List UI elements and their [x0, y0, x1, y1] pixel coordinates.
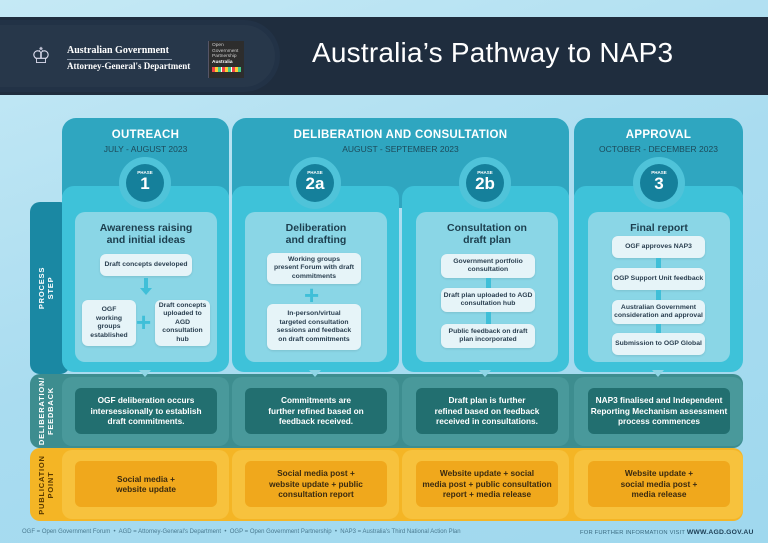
text: DELIBERATION AND CONSULTATION [294, 129, 507, 141]
panel: phase 1 card: hub [176, 336, 189, 343]
panel: phase 1 card: groups [97, 323, 121, 330]
panel: phase 2b card [416, 212, 558, 362]
panel: phase 2b card: Consultation on [447, 222, 527, 234]
OGP logo: Open [212, 43, 224, 48]
side label: deliberation [37, 377, 55, 445]
text: media release [632, 489, 686, 499]
side label: publication [37, 455, 55, 514]
footer: website: FOR FURTHER INFORMATION VISIT WWW.AGD.GOV.AU [580, 529, 754, 536]
OGP logo: Government [212, 48, 238, 54]
panel: phase 3 card: Submission to OGP Global [615, 340, 702, 347]
text: feedback received. [279, 416, 353, 426]
text: Australian Government [67, 44, 172, 60]
text: PHASE [477, 170, 493, 175]
text: APPROVAL [626, 129, 691, 141]
phase inner panels [62, 186, 229, 372]
text: AUGUST - SEPTEMBER 2023 [342, 144, 459, 154]
column headers: OUTREACH [112, 129, 179, 141]
feedback texts: OGF deliberation occurs [98, 395, 194, 405]
phase badges [119, 157, 171, 209]
panel: phase 2b card: draft plan [463, 234, 511, 246]
text: consultation report [278, 489, 354, 499]
side label: publication: PUBLICATION [37, 455, 46, 514]
panel: phase 2a card: commitments [292, 273, 336, 280]
publication texts: website update [116, 484, 176, 494]
OGP logo: Partnership [212, 54, 237, 59]
text: Website update + social [440, 468, 534, 478]
panel: phase 2a card [245, 212, 387, 362]
text: Australian Government: Australian Government [67, 45, 169, 56]
text: refined based on feedback [435, 406, 539, 416]
panel: phase 2a card: present Forum with draft [274, 264, 354, 271]
text: Social media post + [277, 468, 355, 478]
panel: phase 3 card: Final report [630, 222, 688, 234]
panel: phase 3 card: consideration and approval [614, 312, 703, 319]
side label: process step: PROCESS [37, 267, 46, 309]
panel: phase 3 card [588, 212, 730, 362]
icon: coat of arms: ♔ [31, 43, 51, 68]
publication row cells [62, 450, 229, 519]
panel: phase 2b card: Draft plan uploaded to AGD [444, 292, 532, 298]
text: OCTOBER - DECEMBER 2023 [599, 144, 718, 154]
panel: phase 1 card: uploaded to AGD [163, 310, 202, 326]
panel: phase 2a card: targeted consultation [279, 318, 349, 326]
panel: phase 3 card: OGF approves NAP3 [625, 243, 692, 250]
panel: phase 1 card: and initial ideas [107, 234, 185, 246]
phase badges: 1 [140, 174, 150, 193]
logo panel [0, 25, 275, 87]
text: PHASE [651, 170, 667, 175]
feedback texts: draft commitments. [108, 416, 184, 426]
panel: phase 2a card: + [304, 280, 319, 310]
panel: phase 2a card: Deliberation [286, 222, 346, 234]
text: report + media release [443, 489, 531, 499]
panel: phase 1 card: Draft concepts [159, 302, 206, 309]
panel: phase 2a card: Working groups [288, 256, 340, 263]
text: media post + public consultation [422, 479, 552, 489]
feedback texts: intersessionally to establish [90, 406, 202, 416]
text: Website update + [625, 468, 693, 478]
panel: phase 1 card: OGF [102, 306, 116, 313]
side label: deliberation: DELIBERATION/ [37, 377, 46, 445]
panel: phase 1 card: established [90, 332, 128, 338]
column headers [62, 118, 229, 208]
row: publication [30, 448, 743, 521]
side label: deliberation: FEEDBACK [46, 387, 55, 435]
column headers: JULY - AUGUST 2023 [104, 144, 187, 154]
publication texts: Social media + [117, 474, 175, 484]
panel: phase 1 card: consultation [162, 327, 203, 334]
panel: phase 1 card [75, 212, 217, 362]
phase badges: PHASE [137, 170, 153, 175]
publication texts [75, 461, 217, 507]
text: social media post + [621, 479, 697, 489]
side label: process step [37, 267, 55, 309]
panel: phase 2a card: and drafting [286, 234, 346, 246]
OGP logo [208, 41, 244, 78]
OGP logo: Australia [212, 60, 233, 64]
feedback row cells [62, 377, 229, 446]
text: further refined based on [268, 406, 364, 416]
side label: publication: POINT [46, 471, 55, 498]
panel: phase 2a card: sessions and feedback [277, 327, 351, 334]
panel: phase 2b card: consultation hub [461, 300, 515, 307]
arrows down [139, 370, 151, 377]
logo panel: Attorney-General's Department [67, 61, 190, 71]
panel: phase 1 card: Awareness raising [100, 222, 192, 234]
text: website update + public [269, 479, 363, 489]
text: 3 [654, 174, 664, 193]
text: Draft plan is further [448, 395, 525, 405]
panel: phase 3 card: OGP Support Unit feedback [614, 275, 703, 282]
text: 2b [475, 174, 495, 193]
text: 2a [306, 174, 324, 193]
text: received in consultations. [436, 416, 538, 426]
panel: phase 2a card: on draft commitments [278, 336, 350, 342]
text: NAP3 finalised and Independent [596, 395, 722, 405]
panel: phase 2b card: Government portfolio [453, 258, 523, 264]
panel: phase 2a card: In-person/virtual [287, 310, 341, 317]
panel: phase 2b card: Public feedback on draft [449, 328, 527, 334]
footer: abbreviations: OGF = Open Government Forum • AGD = Attorney-General's Department • OGP = Open Government Partnership • NAP3 = Australia's Third National Action Plan [22, 529, 461, 535]
side label: process step: STEP [46, 277, 55, 299]
title: Australia’s Pathway to NAP3 [312, 37, 673, 68]
panel: phase 2b card: consultation [468, 266, 508, 273]
header bar [0, 17, 768, 95]
panel: phase 3 card: Australian Government [621, 304, 696, 310]
text: PHASE [307, 170, 323, 175]
panel: phase 1 card: Draft concepts developed [104, 261, 188, 268]
panel: phase 2b card: plan incorporated [459, 336, 517, 343]
text: Reporting Mechanism assessment [591, 406, 727, 416]
feedback texts [75, 388, 217, 434]
row: deliberation/feedback [30, 374, 743, 448]
text: Commitments are [281, 395, 351, 405]
text: process commences [618, 416, 700, 426]
panel: phase 1 card: + [136, 307, 151, 337]
process step side block [30, 202, 70, 374]
panel: phase 1 card: working [96, 314, 122, 322]
